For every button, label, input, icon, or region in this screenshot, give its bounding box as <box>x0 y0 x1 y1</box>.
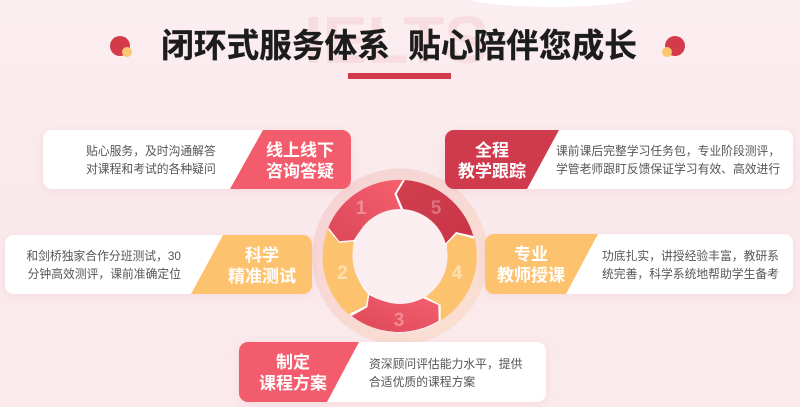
text: online description: 对课程和考试的各种疑问 <box>86 162 216 176</box>
label: teacher tab <box>485 234 598 294</box>
title: 闭环式服务体系 贴心陪伴您成长 <box>161 27 637 64</box>
panel: 专业教师授课 <box>485 234 793 294</box>
text: plan description <box>369 357 522 389</box>
text: tracking description: 学管老师跟盯反馈保证学习有效、高效进行 <box>556 162 780 176</box>
label: tracking tab: 教学跟踪 <box>458 162 526 181</box>
label: online tab <box>230 130 351 189</box>
background decoration: IELTS <box>304 3 489 78</box>
segment 3: 3 <box>394 310 404 331</box>
text: tracking description: 课前课后完整学习任务包，专业阶段测评， <box>556 144 780 158</box>
label: plan tab <box>239 342 359 402</box>
text: online description <box>86 144 216 176</box>
text: teacher description <box>602 249 779 281</box>
text: plan description: 资深顾问评估能力水平，提供 <box>369 357 522 371</box>
text: teacher description: 统完善，科学系统地帮助学生备考 <box>602 267 779 281</box>
label: online tab: 咨询答疑 <box>266 162 334 181</box>
label: plan tab: 课程方案 <box>259 374 327 393</box>
segment 2: 2 <box>337 263 348 284</box>
label: testing tab: 科学 <box>245 246 279 265</box>
text: tracking description <box>556 144 780 176</box>
panel: 科学精准测试 <box>5 235 312 294</box>
segment 4 <box>426 234 477 321</box>
central cycle diagram <box>312 168 486 342</box>
text: plan description: 合适优质的课程方案 <box>369 375 475 389</box>
segment 3 <box>352 295 439 332</box>
label: teacher tab: 教师授课 <box>497 266 565 285</box>
label: teacher tab: 专业 <box>514 245 548 264</box>
title underline <box>348 73 451 79</box>
label: tracking tab: 全程 <box>475 141 509 160</box>
segment 1 <box>328 180 403 241</box>
label: online tab: 线上线下 <box>266 141 334 160</box>
segment 5 <box>397 180 473 243</box>
text: testing description <box>26 249 181 281</box>
label: plan tab: 制定 <box>276 353 310 372</box>
panel: 全程教学跟踪 <box>445 130 793 189</box>
label: testing tab <box>191 235 312 294</box>
text: testing description: 和剑桥独家合作分班测试，30 <box>26 249 181 263</box>
text: teacher description: 功底扎实，讲授经验丰富，教研系 <box>602 249 779 263</box>
panel: 线上线下咨询答疑 <box>43 130 351 189</box>
segment 4: 4 <box>452 263 463 284</box>
text: testing description: 分钟高效测评，课前准确定位 <box>28 267 181 281</box>
text: online description: 贴心服务，及时沟通解答 <box>86 144 216 158</box>
segment 1: 1 <box>356 198 367 219</box>
icon: right title dots <box>662 36 685 57</box>
label: tracking tab <box>445 130 559 189</box>
label: testing tab: 精准测试 <box>228 267 296 286</box>
segment 5: 5 <box>431 198 442 219</box>
segment 2 <box>323 229 368 314</box>
panel: 制定课程方案 <box>239 342 546 402</box>
icon: left title dots <box>110 36 132 57</box>
